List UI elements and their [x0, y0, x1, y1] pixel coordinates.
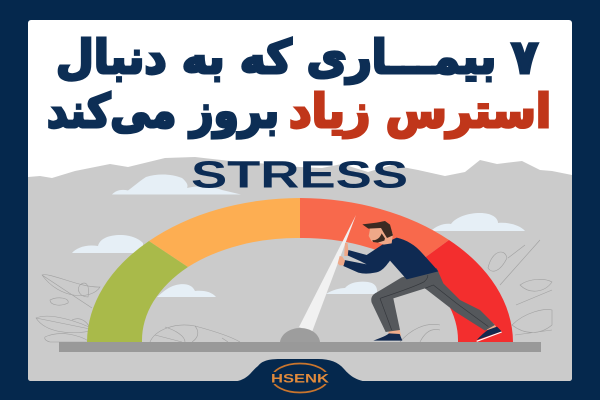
man: beard — [372, 233, 385, 243]
man: seam lines — [380, 275, 488, 330]
icon: gauge hub — [280, 328, 320, 342]
panel: grey landscape — [28, 157, 572, 381]
man: hair — [362, 221, 393, 238]
man: torso and arms — [343, 238, 438, 279]
gauge segment: green — [87, 241, 188, 342]
gauge segment: orange — [149, 198, 300, 267]
footer: navy band with logo tab — [28, 359, 572, 400]
man: legs — [371, 268, 502, 341]
gauge segment: coral — [300, 198, 449, 267]
icon: clouds — [72, 174, 525, 297]
man: upper body — [338, 221, 438, 279]
heading: title line 1: ۷ بیمـــاری که به دنبال — [56, 30, 538, 84]
gauge segment: red — [412, 240, 513, 342]
logo: HSENK — [268, 364, 332, 392]
man: shoes — [373, 327, 502, 341]
chart: stress gauge — [87, 198, 513, 342]
man: ankles — [388, 323, 497, 337]
heading: STRESS: STRESS — [191, 154, 408, 196]
decorative leaves left — [36, 275, 240, 342]
illustration: man pushing needle — [338, 221, 502, 341]
heading: title line 2 red: استرس زیاد — [289, 84, 551, 138]
base bar — [59, 342, 541, 352]
logo: HSENK: HSENK — [271, 372, 329, 386]
man: trousers — [371, 268, 495, 332]
man: face and neck — [369, 225, 393, 245]
man: hands — [338, 243, 348, 265]
decorative leaves right — [400, 240, 552, 342]
icon: needle — [299, 215, 356, 332]
heading: title line 2 navy: بروز می‌کند — [47, 84, 279, 138]
